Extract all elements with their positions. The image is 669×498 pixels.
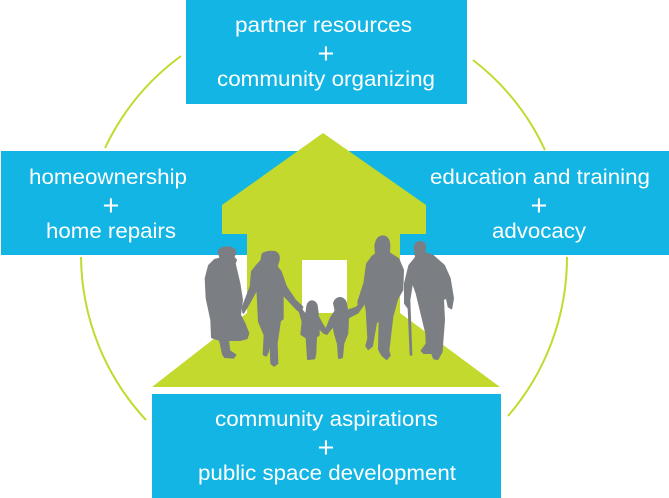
panel: education and training + advocacy [346, 151, 669, 255]
panel: community aspirations + public space development: + [318, 432, 334, 464]
mother [243, 252, 302, 366]
panel: education and training + advocacy: education and training [430, 166, 650, 189]
panel: partner resources + community organizing: community organizing [217, 68, 435, 91]
panel: education and training + advocacy: advocacy [492, 220, 587, 243]
panel: homeownership + home repairs [1, 151, 301, 255]
panel: community aspirations + public space development: public space development [198, 462, 456, 485]
panel: community aspirations + public space development: community aspirations [215, 408, 438, 431]
panel: partner resources + community organizing: + [318, 38, 334, 70]
child left [300, 301, 326, 359]
panel: homeownership + home repairs: home repairs [46, 220, 176, 243]
panel: partner resources + community organizing [186, 0, 467, 104]
grandfather with cane [405, 242, 453, 359]
panel: partner resources + community organizing: partner resources [235, 14, 412, 37]
panel: homeownership + home repairs: + [103, 190, 119, 222]
child right [325, 298, 363, 358]
panel: education and training + advocacy: + [531, 190, 547, 222]
icon: green house with path [152, 133, 500, 387]
grandmother [206, 247, 248, 358]
panel: community aspirations + public space development [152, 394, 501, 498]
father [358, 236, 403, 359]
family silhouettes [206, 236, 453, 366]
circular ring of arcs [81, 56, 567, 420]
panel: homeownership + home repairs: homeownership [29, 166, 187, 189]
